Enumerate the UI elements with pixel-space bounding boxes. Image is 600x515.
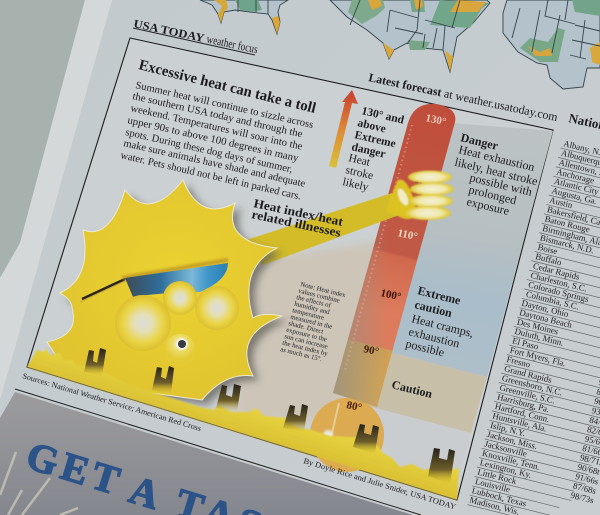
note text: temperature: [292, 307, 325, 322]
byline: By Doyle Rice and Julie Snider, USA TODAY: [302, 456, 457, 511]
skyline band: [27, 348, 459, 500]
thumb nail: [396, 187, 410, 207]
sun shadow: [53, 185, 288, 405]
intro paragraph: Summer heat will continue to sizzle across: [134, 80, 314, 131]
degree labels: 110°: [396, 227, 419, 243]
skyline silhouette 4: [283, 404, 308, 432]
degree labels: 80°: [345, 399, 363, 414]
intro paragraph: water. Pets should not be left in parked cars.: [119, 150, 302, 203]
arm label: Heat index/heat: [252, 196, 345, 229]
map: right: [503, 0, 600, 89]
national cities table: Duluth, Minn.: [514, 326, 565, 348]
skyline silhouette 1: [84, 348, 106, 376]
national cities table: Austin: [548, 195, 574, 210]
national cities table: Louisville: [474, 476, 511, 494]
intro paragraph: the southern USA today and through the: [131, 91, 304, 140]
national cities table: Islip, N.Y.: [489, 420, 527, 438]
national cities table: Lubbock, Texas: [471, 485, 528, 509]
national cities table: Boise: [537, 242, 559, 256]
note text: values combine: [298, 288, 340, 305]
intro paragraph: weekend. Temperatures will soar into the: [129, 103, 304, 153]
sources credit: Sources: National Weather Service; American Red Cross: [21, 371, 202, 433]
degree labels: 120°: [413, 173, 436, 189]
national cities table: Des Moines: [516, 317, 560, 337]
tube: [333, 104, 455, 407]
note text: as much as 15°.: [280, 346, 323, 363]
section tag: USA TODAY weather focus: weather focus: [205, 32, 259, 56]
legend: danger: exposure: [465, 194, 511, 218]
national cities table: [467, 137, 600, 515]
legend: caution: Caution: [390, 377, 434, 401]
national cities table: Grand Rapids: [503, 363, 553, 385]
arm label: related illnesses: [250, 207, 342, 240]
headline: Excessive heat can take a toll: [137, 57, 317, 117]
national cities table: Daytona Beach: [518, 307, 574, 330]
legend: danger: prolonged: [467, 182, 518, 207]
sun body: [47, 180, 282, 400]
intro paragraph: upper 90s to above 100 degrees in many: [126, 115, 300, 165]
note text: shade. Direct: [288, 320, 324, 336]
legend: extreme caution: [404, 283, 475, 359]
national cities table: Fresno: [506, 354, 532, 370]
section tag: USA TODAY weather focus: USA TODAY: [132, 18, 206, 45]
sunglasses lens: [125, 263, 228, 297]
map: centre: [330, 0, 490, 72]
nose ball: [163, 281, 197, 315]
legend: extreme caution: possible: [404, 336, 446, 359]
national cities table: Augusta, Ga.: [551, 185, 598, 206]
degree labels: [345, 112, 447, 414]
national cities table: Bismarck, N.D.: [539, 232, 595, 255]
ad decorative grass: [0, 452, 78, 515]
bulb: [310, 398, 384, 472]
fingers: [408, 170, 452, 184]
legend: extreme danger: Heat: [347, 152, 372, 169]
degree labels: 90°: [362, 343, 380, 358]
national cities table: Cedar Rapids: [532, 261, 581, 282]
mercury highlight: [331, 403, 339, 437]
page edge stack: [0, 0, 112, 400]
national cities table: 91/66s: [574, 471, 600, 487]
panel: danger and extreme caution band: [385, 122, 553, 377]
ad panel: [0, 389, 421, 515]
note text: Note: Heat index: [300, 281, 347, 299]
skyline silhouette 2: [152, 366, 174, 394]
desk surface: [0, 0, 85, 278]
skyline silhouette 6: [428, 448, 455, 484]
frame background: [27, 38, 553, 500]
national cities table: Colorado Springs: [527, 279, 590, 304]
section tag: USA TODAY weather focus: [132, 18, 259, 56]
panel: lower band: [375, 408, 471, 480]
legend: extreme danger: Extreme: [353, 129, 397, 150]
national cities table: 98/73s: [570, 490, 595, 505]
sunglasses temple: [82, 279, 125, 299]
ad headline: [21, 433, 272, 515]
intro paragraph: spots. During these dog days of summer,: [124, 127, 294, 176]
national cities table: Knoxville, Tenn.: [481, 448, 541, 472]
beige backdrop behind sun: [230, 240, 390, 420]
panel: caution band: [368, 351, 487, 433]
thermometer: [310, 104, 455, 472]
national cities table: Little Rock: [477, 467, 518, 486]
forecast link line: Latest forecast at weather.usatoday.com: [367, 70, 560, 124]
weather maps strip: [200, 0, 600, 89]
legend: extreme danger: above: [356, 117, 387, 135]
national cities table: Lexington, Ky.: [479, 457, 533, 480]
legend: extreme danger: danger: [350, 141, 387, 161]
arm label: [250, 196, 345, 240]
legend: extreme danger: [341, 105, 406, 194]
national cities table: Greensboro, N.C.: [501, 373, 564, 398]
mouth: [164, 334, 196, 366]
note text: the heat index by: [282, 340, 329, 358]
national cities table: Huntsville, Ala.: [492, 410, 548, 434]
intro paragraph: make sure animals have shade and adequate: [122, 138, 307, 190]
national cities table: Hartford, Conn.: [494, 401, 551, 424]
legend: danger: [453, 130, 539, 218]
intro paragraph: [119, 80, 314, 203]
national cities table: Jacksonville: [484, 438, 528, 459]
legend: danger: likely, heat stroke: [453, 155, 539, 188]
yellow ground: [27, 348, 459, 500]
sun character: [47, 180, 288, 405]
legend: extreme danger: 130° and: [360, 105, 406, 127]
national cities table: Buffalo: [534, 251, 563, 267]
national cities table: Baton Rouge: [544, 214, 591, 234]
red-yellow arrow: [329, 90, 358, 168]
national cities table: Jackson, Miss.: [486, 429, 538, 451]
skyline silhouette 5: [353, 424, 379, 454]
national cities table: El Paso: [511, 335, 540, 352]
national cities table: 87/68s: [572, 480, 598, 496]
degree labels: 100°: [379, 287, 402, 303]
note text: measured in the: [290, 314, 333, 331]
arm reaching to thermometer: [240, 193, 402, 265]
right cheek: [195, 286, 239, 330]
note text: the effects of: [296, 294, 332, 310]
national cities table: Fort Myers, Fla.: [509, 345, 567, 368]
tick marks: [345, 125, 412, 370]
map: left: [200, 0, 288, 34]
legend: danger: possible with: [468, 170, 533, 199]
hand gripping thermometer: [386, 170, 454, 220]
national cities table: Anchorage: [555, 166, 595, 186]
palm and thumb: [386, 180, 416, 219]
legend: danger: Heat exhaustion: [457, 142, 536, 174]
national cities table: Atlantic City: [553, 176, 600, 197]
legend: extreme danger: stroke: [344, 164, 374, 182]
note text: exposure to the: [286, 327, 328, 343]
national cities table: Columbia, S.C.: [525, 289, 580, 312]
note text: [280, 281, 347, 363]
note text: sun can increase: [284, 333, 328, 351]
left cheek: [115, 295, 171, 351]
legend: extreme caution: Heat cramps,: [410, 311, 475, 340]
legend: extreme danger: likely: [341, 176, 370, 194]
legend: extreme caution: Extreme: [416, 283, 463, 308]
legend: extreme caution: exhaustion: [407, 324, 461, 350]
legend: extreme caution: caution: [413, 297, 454, 320]
national cities table: Harrisburg, Pa.: [496, 392, 550, 414]
national cities table: Greenville, S.C.: [499, 382, 556, 406]
degree labels: 130°: [424, 112, 447, 128]
national cities table: Dayton, Ohio: [521, 298, 570, 319]
graphic frame: [27, 38, 553, 500]
national cities table: Charleston, S.C.: [530, 270, 588, 294]
bulb glint: [323, 430, 333, 440]
skyline silhouette 3: [216, 384, 241, 412]
tube left shading: [333, 104, 455, 407]
note text: humidity and: [294, 301, 331, 316]
sunglasses shadow: [122, 260, 228, 278]
ad headline: GET: [21, 433, 130, 505]
legend: danger: Danger: [459, 130, 500, 153]
